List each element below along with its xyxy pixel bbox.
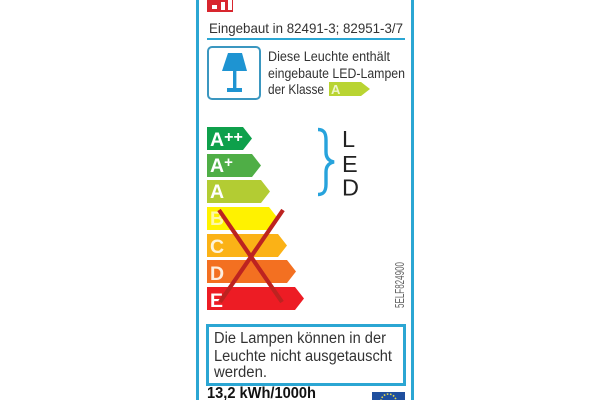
lamp description text: eingebaute LED-Lampen [268, 66, 405, 81]
arrow: E [207, 287, 304, 312]
energy scale arrows [207, 127, 304, 312]
icon: table lamp [208, 47, 260, 99]
arrow: A++: A [210, 129, 224, 151]
notice box: werden. [213, 364, 267, 381]
arrow: E: E [210, 290, 223, 312]
class A badge [329, 82, 370, 97]
arrow: D [207, 260, 296, 285]
arrow: D: D [210, 263, 224, 285]
arrow: A++ [207, 127, 252, 151]
LED letters [342, 126, 359, 200]
LED letters: E [342, 151, 358, 177]
notice box [208, 326, 404, 384]
arrow: A [207, 180, 270, 203]
arrow: A+: + [224, 154, 233, 171]
lamp description text: Diese Leuchte enthält [268, 49, 390, 64]
LED letters: L [342, 126, 355, 152]
icon: red logo [207, 0, 233, 12]
notice box: Die Lampen können in der [214, 330, 386, 347]
red cross [219, 210, 283, 302]
LED letters: D [342, 174, 359, 200]
brace [318, 130, 334, 194]
vertical code: 5ELF824900 [393, 262, 407, 308]
arrow: A+: A [210, 155, 224, 177]
class A badge: A [331, 82, 341, 97]
model reference text: Eingebaut in 82491-3; 82951-3/7 [209, 20, 403, 36]
notice box: Leuchte nicht ausgetauscht [214, 348, 393, 365]
arrow: B [207, 207, 278, 230]
label frame [196, 0, 414, 400]
icon: EU flag [372, 392, 405, 400]
arrow: A: A [210, 181, 224, 203]
lamp description text: der Klasse [268, 82, 324, 97]
arrow: C [207, 234, 287, 258]
arrow: C: C [210, 236, 224, 258]
arrow: B: B [210, 208, 224, 230]
lamp description text [268, 49, 405, 97]
arrow: A+ [207, 154, 261, 177]
arrow: A++: ++ [224, 129, 243, 146]
